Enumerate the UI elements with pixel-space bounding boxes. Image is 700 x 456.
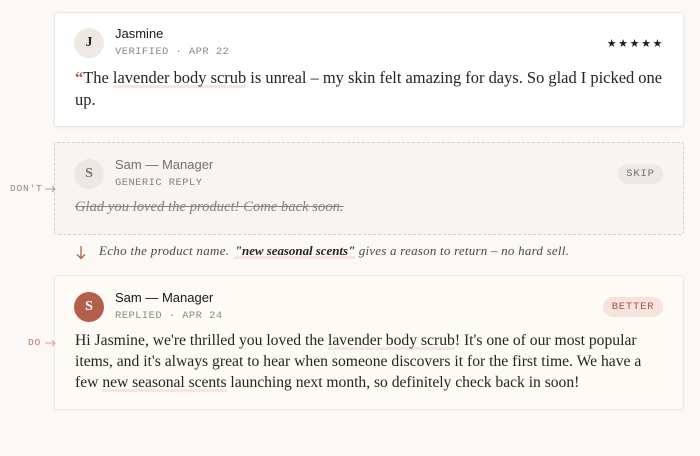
label: don't: DON'T: [10, 183, 43, 194]
icon: avatar S grey: [74, 159, 104, 189]
panel: generic reply: [54, 142, 684, 235]
label: do: [28, 337, 56, 348]
icon: avatar S accent: S: [85, 299, 93, 314]
reply text: items, and it's always great to hear when someone discovers it for the first time. We have a: [75, 353, 641, 370]
reply text: Hi Jasmine, we're thrilled you loved the lavender body scrub! It's one of our most popular: [75, 332, 637, 349]
review text: [75, 68, 662, 109]
arrow: down: [76, 246, 86, 260]
pill: better: [603, 297, 663, 317]
pill: better: BETTER: [612, 301, 654, 313]
reviewer name: Jasmine: [115, 26, 163, 41]
review meta: VERIFIED · APR 22: [115, 46, 229, 58]
review text: up.: [75, 90, 96, 109]
reply meta: GENERIC REPLY: [115, 177, 202, 189]
star rating: ★★★★★: [607, 38, 664, 50]
struck generic text: Glad you loved the product! Come back soon.: [75, 199, 344, 215]
reply name: Sam — Manager: [115, 157, 213, 172]
manager name: Sam — Manager: [115, 290, 213, 305]
icon: avatar J: J: [86, 35, 92, 50]
panel: better reply: [54, 275, 684, 410]
annotation note: Echo the product name. "new seasonal scents" gives a reason to return – no hard sell.: [99, 243, 569, 258]
icon: avatar S accent: [74, 292, 104, 322]
panel: customer review: [54, 12, 684, 127]
icon: avatar S grey: S: [85, 166, 93, 181]
label: do: DO: [28, 337, 41, 348]
pill: skip: [618, 164, 663, 184]
reply text: few new seasonal scents launching next month, so definitely check back in soon!: [75, 374, 579, 391]
pill: skip: SKIP: [626, 168, 655, 180]
reply text: [75, 332, 642, 392]
icon: avatar J: [74, 28, 104, 58]
reply date: REPLIED · APR 24: [115, 310, 223, 322]
review text: “The lavender body scrub is unreal – my skin felt amazing for days. So glad I picked one: [75, 68, 662, 87]
